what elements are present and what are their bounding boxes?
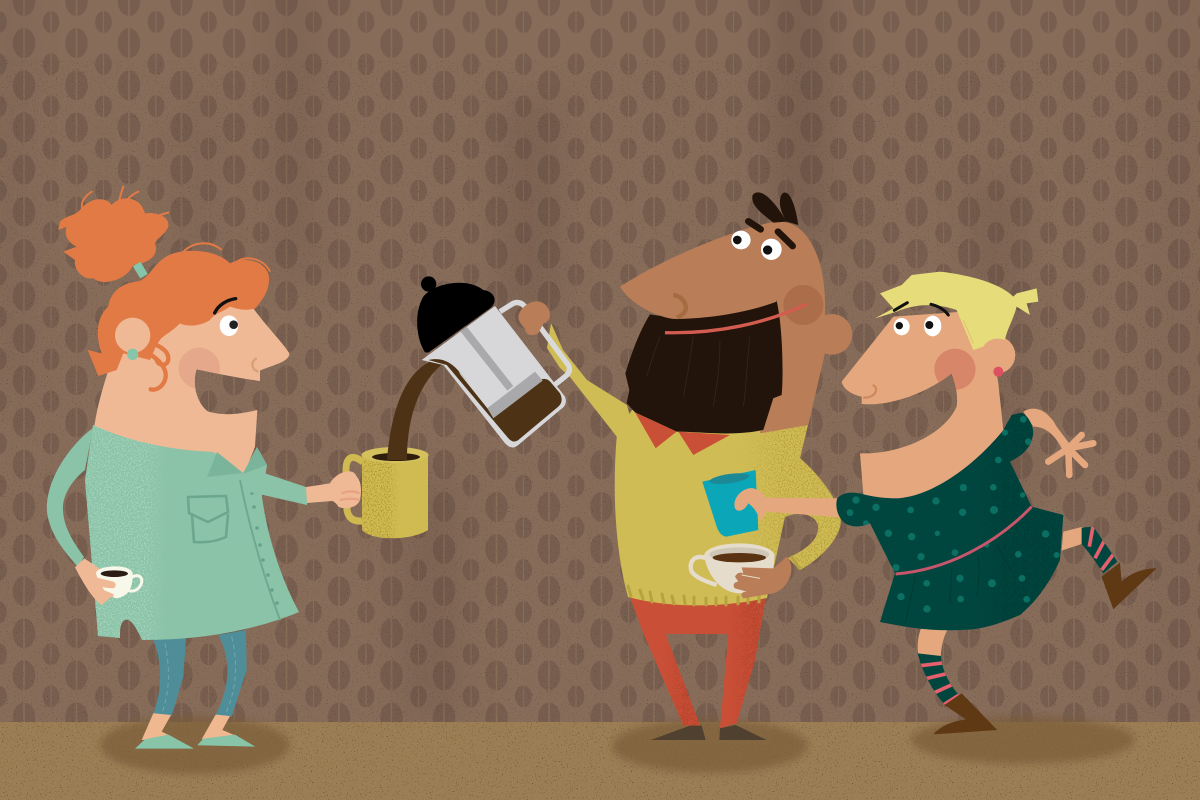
hair bun bbox=[58, 198, 168, 282]
raised leg bbox=[1062, 527, 1083, 551]
blue mug bbox=[702, 470, 758, 537]
french press bbox=[417, 276, 569, 447]
beard bbox=[625, 301, 783, 433]
forearm holding mug bbox=[306, 482, 345, 503]
press handle bbox=[500, 303, 569, 387]
boot bbox=[933, 693, 997, 734]
cup handle bbox=[691, 557, 717, 585]
pouring hand bbox=[518, 301, 550, 335]
floor shadow: man bbox=[612, 719, 808, 773]
eyes bbox=[894, 316, 941, 336]
floor bbox=[0, 722, 1200, 800]
raised boot bbox=[1102, 563, 1157, 609]
right sleeve bbox=[250, 470, 309, 505]
raised arm and fingers bbox=[1023, 409, 1093, 475]
hand gripping mug bbox=[320, 471, 361, 508]
mug handle bbox=[346, 457, 363, 521]
coffee stream bbox=[387, 357, 445, 460]
hair tufts bbox=[752, 192, 798, 225]
earring bbox=[993, 367, 1003, 377]
eyebrows bbox=[894, 303, 948, 315]
glass highlight bbox=[458, 371, 493, 413]
left forearm and hand bbox=[734, 488, 840, 522]
eyebrows bbox=[748, 221, 793, 246]
floor shadow: left woman bbox=[100, 716, 290, 774]
shoes bbox=[651, 725, 767, 740]
trousers bbox=[630, 597, 767, 740]
character: woman with red hair bbox=[47, 187, 345, 749]
ear bbox=[978, 336, 1015, 374]
belt bbox=[896, 507, 1032, 574]
head and neck bbox=[58, 187, 289, 477]
coffee in press bbox=[428, 359, 562, 442]
nose line bbox=[863, 385, 876, 398]
floor shadow: right woman bbox=[911, 716, 1135, 764]
head and neck bbox=[842, 310, 1003, 498]
eye bbox=[220, 315, 238, 336]
press lid bbox=[417, 283, 495, 353]
hair band bbox=[133, 262, 148, 278]
hand and cream cup bbox=[691, 543, 791, 598]
sweater sleeve bbox=[547, 323, 632, 437]
character: bearded man bbox=[417, 192, 852, 740]
pleats bbox=[905, 543, 1012, 623]
character: blonde woman bbox=[734, 272, 1157, 734]
eyebrow bbox=[215, 299, 236, 313]
ear bbox=[812, 314, 852, 355]
ear bbox=[115, 318, 150, 353]
small cup and hand bbox=[75, 558, 142, 605]
smile line bbox=[665, 304, 807, 333]
neck and head bbox=[620, 222, 825, 433]
polka dots bbox=[847, 416, 1060, 613]
nose line bbox=[673, 295, 686, 317]
lid knob bbox=[421, 276, 436, 292]
earring bbox=[127, 349, 138, 360]
hair bbox=[88, 251, 269, 376]
sweater bbox=[615, 410, 845, 605]
cheek bbox=[934, 349, 976, 390]
dress bbox=[836, 413, 1063, 630]
hair bbox=[875, 272, 1038, 350]
left sleeve bbox=[47, 428, 93, 567]
nose overlap bbox=[647, 280, 777, 319]
hair curls bbox=[147, 343, 168, 390]
plunger bbox=[487, 372, 543, 418]
glass body bbox=[422, 306, 566, 447]
cheek bbox=[783, 285, 823, 325]
legs and shoes bbox=[135, 630, 255, 749]
shirt collar bbox=[635, 412, 730, 455]
shirt collar bbox=[207, 447, 267, 477]
shirt bbox=[85, 425, 299, 643]
eyes bbox=[731, 231, 782, 260]
shirt pocket bbox=[188, 496, 228, 542]
standing leg bbox=[915, 627, 997, 734]
big yellow mug bbox=[346, 447, 428, 545]
